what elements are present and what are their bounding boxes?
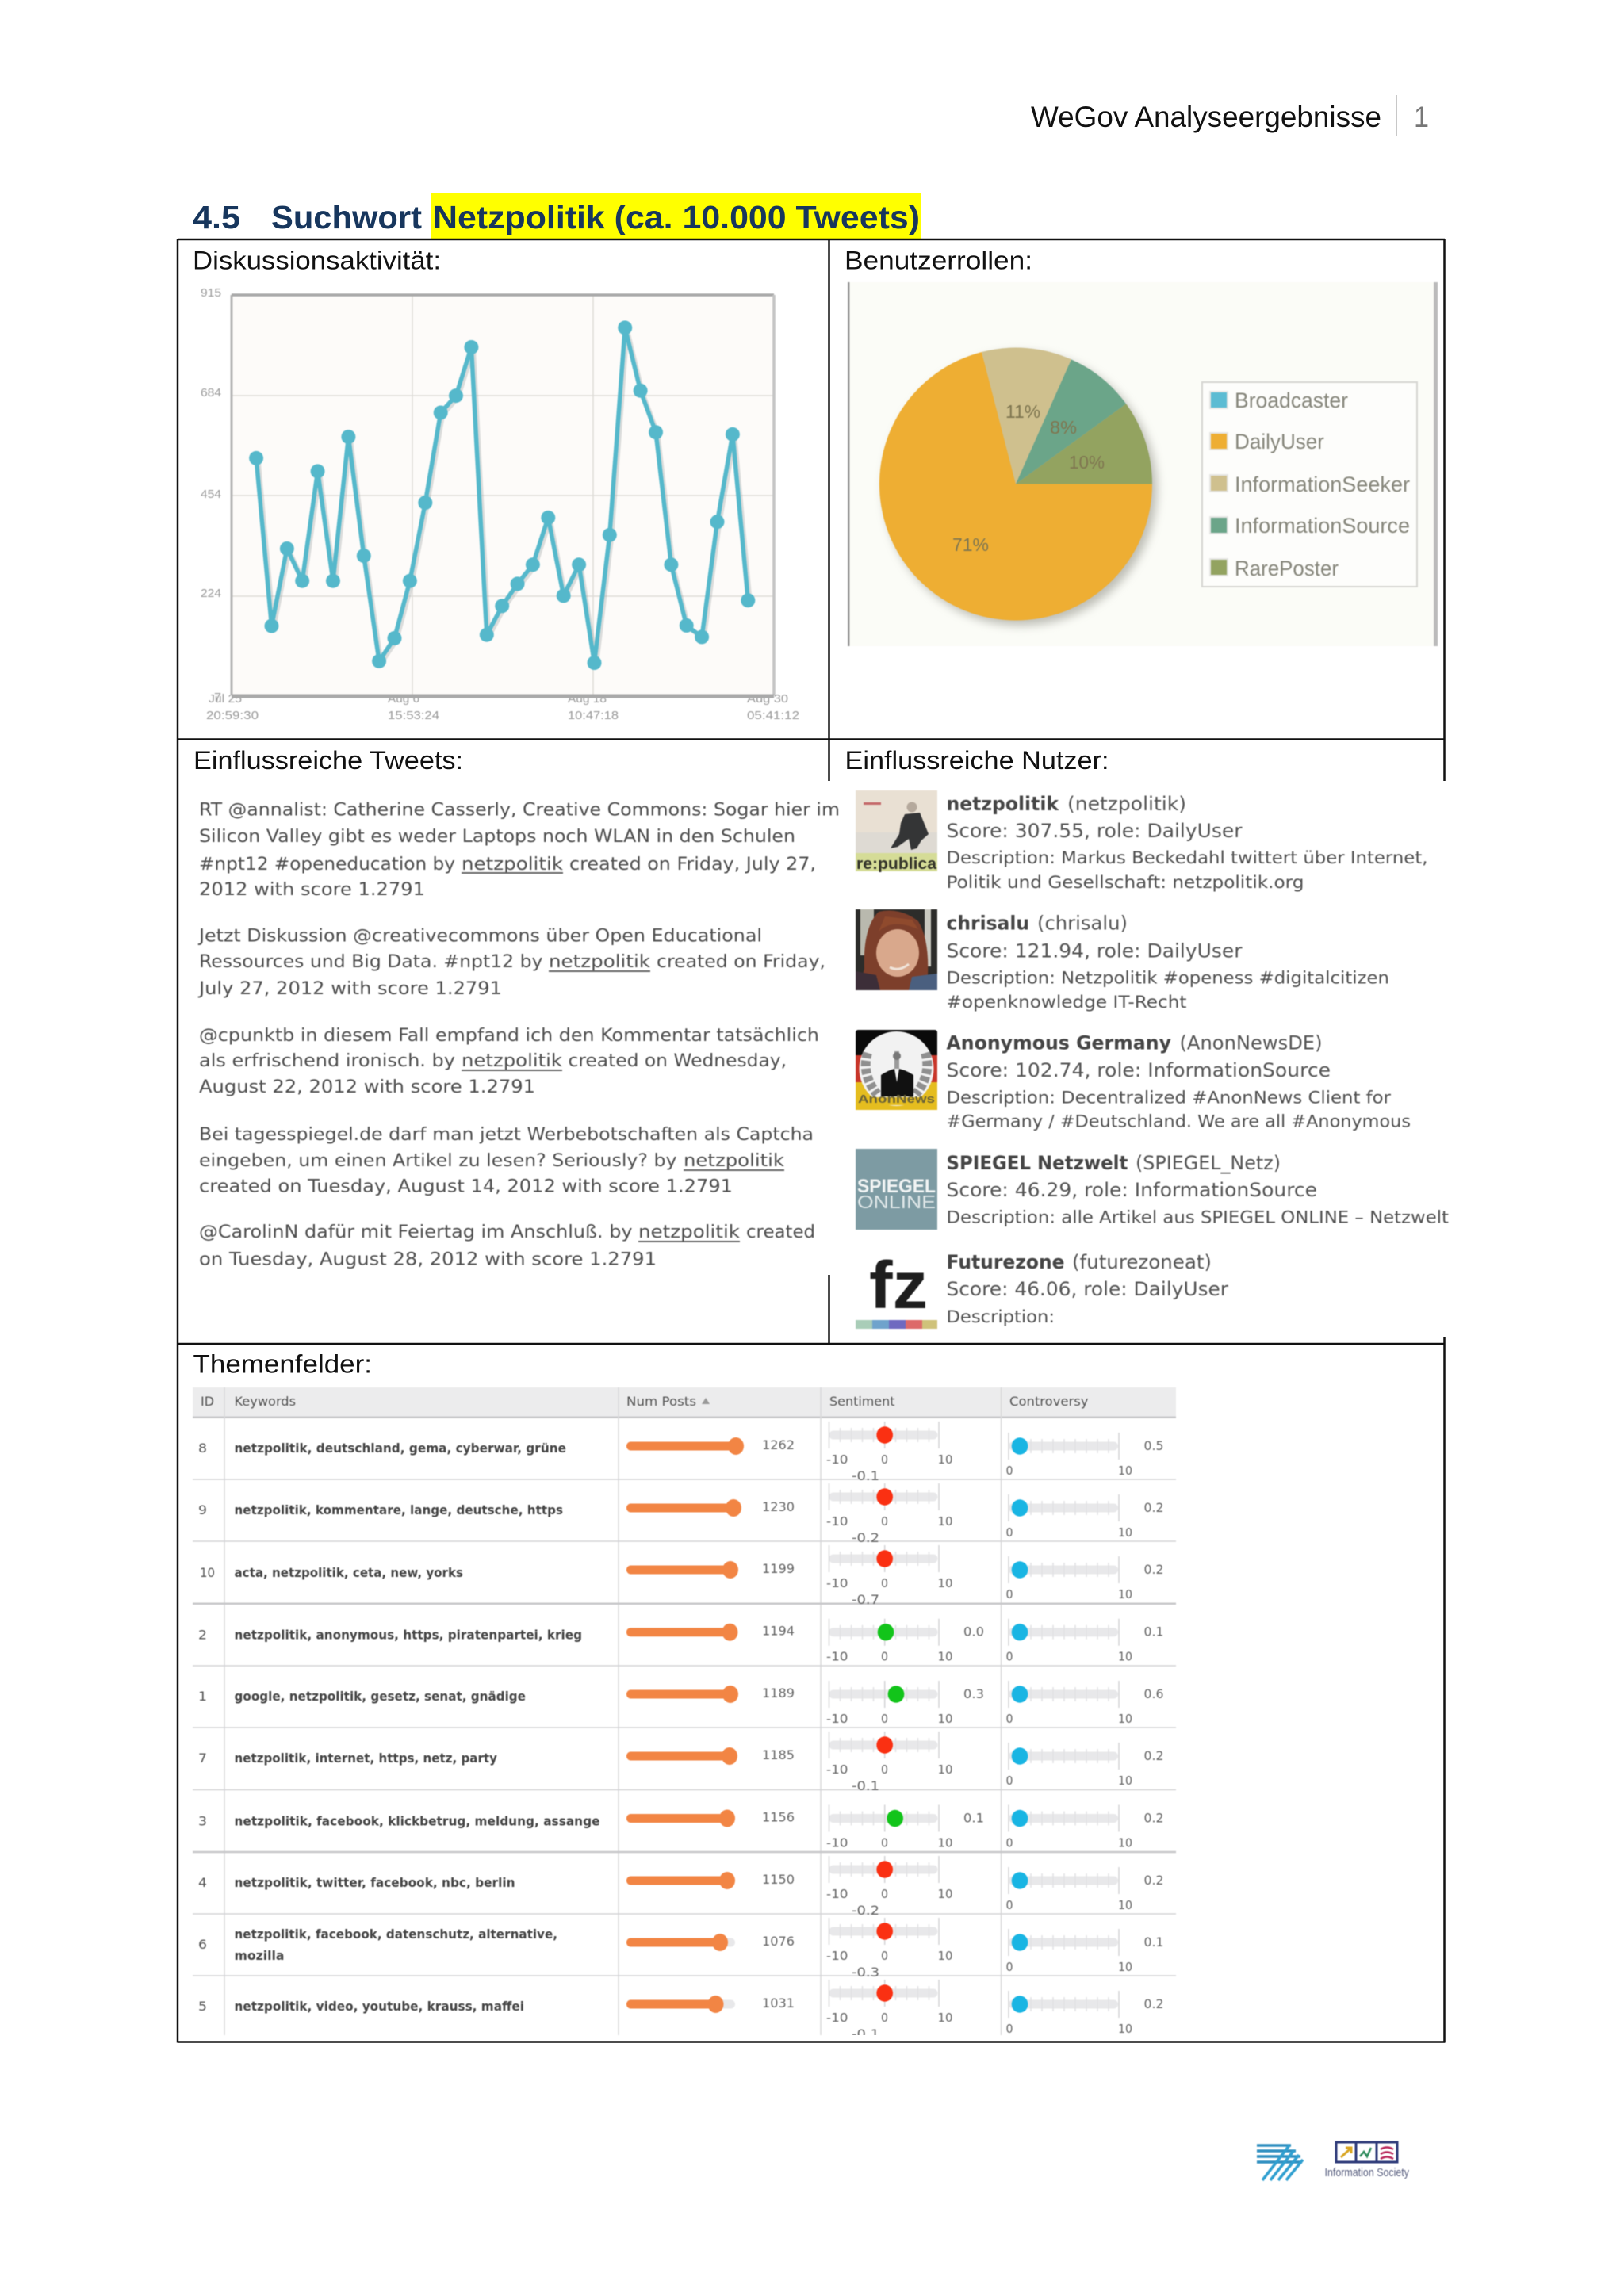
row: topic 10: 10 xyxy=(937,1576,953,1590)
tweet 3: netzpolitik xyxy=(462,1051,562,1071)
row: topic 2: 0.1 xyxy=(1143,1624,1164,1640)
row: topic 10: -0.7 xyxy=(852,1592,879,1607)
tweet 2 xyxy=(197,926,825,999)
row: topic 2: 10 xyxy=(1118,1650,1132,1664)
row: topic 1: 0 xyxy=(1005,1712,1013,1726)
tweet 4 xyxy=(199,1125,814,1197)
row: topic 4: 10 xyxy=(1118,1898,1132,1912)
user: Anonymous Germany: #Germany / #Deutschland. We are all #Anonymous xyxy=(947,1112,1411,1131)
row: topic 8: -10 xyxy=(826,1452,848,1467)
line chart: discussion activity: 15:53:24 xyxy=(388,709,439,722)
row: topic 6: 10 xyxy=(937,1949,953,1963)
user: netzpolitik: Description: Markus Beckedahl twittert über Internet, xyxy=(947,848,1427,867)
row: topic 10: 0 xyxy=(881,1576,888,1590)
tweet 2: Jetzt Diskussion @creativecommons über Open Educational xyxy=(197,926,762,947)
page header: 1 xyxy=(1414,101,1429,133)
row: topic 4: 0 xyxy=(1005,1898,1013,1912)
row: topic 2 xyxy=(198,1619,1164,1664)
row: topic 1 xyxy=(198,1681,1164,1726)
row: topic 9: 0.2 xyxy=(1143,1500,1164,1515)
tweet 1: created on Friday, July 27, xyxy=(569,855,816,874)
section title: Suchwort xyxy=(271,199,422,235)
row: topic 5: 0 xyxy=(1005,2022,1013,2036)
user: SPIEGEL Netzwelt: SPIEGEL Netzwelt xyxy=(947,1152,1128,1174)
row: topic 10: 0 xyxy=(1005,1587,1013,1601)
logo: Information Society xyxy=(1324,2142,1409,2179)
icon: Anonymous avatar: AnonNews xyxy=(858,1093,935,1106)
tweet 3: August 22, 2012 with score 1.2791 xyxy=(199,1077,535,1097)
row: topic 1: 1189 xyxy=(762,1686,795,1701)
user: Anonymous Germany: (AnonNewsDE) xyxy=(1180,1032,1323,1054)
line chart: discussion activity: 454 xyxy=(201,488,221,501)
heading: Einflussreiche Nutzer: Einflussreiche Nutzer: xyxy=(845,746,1109,775)
row: topic 8: 0 xyxy=(1005,1464,1013,1478)
row: topic 6: 10 xyxy=(1118,1960,1132,1974)
row: topic 3: 3 xyxy=(198,1814,207,1828)
row: topic 5: netzpolitik, video, youtube, krauss, maffei xyxy=(235,1999,524,2014)
row: topic 8: netzpolitik, deutschland, gema, cyberwar, grüne xyxy=(235,1441,566,1456)
tweet 4: eingeben, um einen Artikel zu lesen? Seriously? by xyxy=(199,1151,677,1171)
row: topic 7: 0.2 xyxy=(1143,1748,1164,1763)
user: chrisalu: #openknowledge IT-Recht xyxy=(947,993,1186,1012)
user: SPIEGEL Netzwelt xyxy=(856,1149,1449,1230)
logo: Information Society: Information Society xyxy=(1324,2166,1409,2179)
row: topic 2: 2 xyxy=(198,1628,207,1643)
user: Anonymous Germany: Score: 102.74, role: InformationSource xyxy=(947,1059,1331,1081)
row: topic 9: 0 xyxy=(1005,1525,1013,1540)
table header xyxy=(193,1387,1176,2035)
line chart: discussion activity: 915 xyxy=(201,286,221,300)
row: topic 8: -0.1 xyxy=(852,1468,879,1483)
user: SPIEGEL Netzwelt: (SPIEGEL_Netz) xyxy=(1136,1152,1281,1174)
row: topic 5: 1031 xyxy=(762,1996,795,2011)
user: Futurezone: (futurezoneat) xyxy=(1072,1251,1212,1273)
row: topic 8: 8 xyxy=(198,1441,207,1456)
row: topic 4: netzpolitik, twitter, facebook, nbc, berlin xyxy=(235,1875,515,1890)
row: topic 3: 0.2 xyxy=(1143,1811,1164,1825)
row: topic 3: 0 xyxy=(881,1836,888,1850)
tweet 5: netzpolitik xyxy=(638,1223,740,1242)
line chart: discussion activity: 224 xyxy=(201,587,221,600)
row: topic 6: -0.3 xyxy=(852,1965,879,1980)
heading: Diskussionsaktivität: Diskussionsaktivität: xyxy=(193,246,441,274)
row: topic 3: netzpolitik, facebook, klickbetrug, meldung, assange xyxy=(235,1814,600,1828)
row: topic 3 xyxy=(198,1804,1164,1850)
user: chrisalu xyxy=(856,909,1389,1012)
row: topic 3: 0.1 xyxy=(963,1811,984,1825)
row: topic 3: -10 xyxy=(826,1836,848,1850)
pie chart: user roles: 8% xyxy=(1050,417,1077,438)
row: topic 5: 0 xyxy=(881,2011,888,2025)
tweet 1: RT @annalist: Catherine Casserly, Creative Commons: Sogar hier im xyxy=(199,801,840,820)
tweet 3: als erfrischend ironisch. by xyxy=(199,1051,455,1071)
row: topic 3: 0 xyxy=(1005,1836,1013,1850)
pie chart: user roles xyxy=(848,282,1438,646)
row: topic 7: 10 xyxy=(937,1762,953,1777)
row: topic 1: google, netzpolitik, gesetz, senat, gnädige xyxy=(235,1689,526,1704)
line chart: discussion activity: 20:59:30 xyxy=(206,709,259,722)
row: topic 7: netzpolitik, internet, https, netz, party xyxy=(235,1751,498,1766)
icon: Anonymous avatar xyxy=(856,1030,937,1110)
panel: Themenfelder xyxy=(193,1349,1176,2042)
tweet 5: on Tuesday, August 28, 2012 with score 1.2791 xyxy=(199,1249,657,1270)
tweet list xyxy=(197,801,840,1270)
row: topic 6: 6 xyxy=(198,1937,207,1952)
row: topic 1: 1 xyxy=(198,1689,207,1704)
table header: Num Posts xyxy=(626,1394,696,1409)
user: netzpolitik xyxy=(856,790,1427,892)
legend: InformationSeeker xyxy=(1235,473,1410,496)
row: topic 1: 0 xyxy=(881,1712,888,1726)
row: topic 3: 10 xyxy=(937,1836,953,1850)
row: topic 8: 0.5 xyxy=(1143,1438,1164,1453)
panel: Einflussreiche Nutzer xyxy=(845,746,1449,1329)
row: topic 6: 0 xyxy=(1005,1960,1013,1974)
row: topic 7: 10 xyxy=(1118,1774,1132,1788)
panel: Einflussreiche Tweets xyxy=(193,746,840,1270)
row: topic 2: 0 xyxy=(881,1650,888,1664)
line chart: discussion activity: 684 xyxy=(201,386,221,400)
user: Anonymous Germany: Anonymous Germany xyxy=(947,1032,1171,1054)
row: topic 4: 4 xyxy=(198,1875,207,1890)
row: topic 10: 10 xyxy=(1118,1587,1132,1601)
tweet 5 xyxy=(199,1223,815,1270)
table header: Controversy xyxy=(1009,1394,1088,1409)
icon: SPIEGEL ONLINE avatar: SPIEGEL xyxy=(857,1176,936,1197)
row: topic 7: 0 xyxy=(881,1762,888,1777)
tweet 4: Bei tagesspiegel.de darf man jetzt Werbebotschaften als Captcha xyxy=(199,1125,814,1145)
row: topic 7: 0 xyxy=(1005,1774,1013,1788)
section title: 4.5 xyxy=(193,199,240,235)
icon: re:publica avatar xyxy=(856,790,937,873)
row: topic 9: -0.2 xyxy=(852,1530,879,1545)
row: topic 8: 1262 xyxy=(762,1437,795,1452)
row: topic 3: 10 xyxy=(1118,1836,1132,1850)
icon: re:publica avatar: re:publica xyxy=(856,855,937,873)
row: topic 7: 1185 xyxy=(762,1747,795,1762)
row: topic 5: -10 xyxy=(826,2011,848,2025)
row: topic 8: 0 xyxy=(881,1452,888,1467)
row: topic 10: 1199 xyxy=(762,1561,795,1576)
row: topic 8: 10 xyxy=(937,1452,953,1467)
user: SPIEGEL Netzwelt: Description: alle Artikel aus SPIEGEL ONLINE – Netzwelt xyxy=(947,1208,1449,1227)
row: topic 6: mozilla xyxy=(235,1948,284,1963)
tweet 2: July 27, 2012 with score 1.2791 xyxy=(197,979,502,999)
logo: FP7 xyxy=(1257,2145,1303,2180)
line chart: discussion activity: Aug 6 xyxy=(388,692,419,706)
tweet 4: netzpolitik xyxy=(684,1151,784,1171)
row: topic 5: 5 xyxy=(198,1999,207,2014)
row: topic 7 xyxy=(198,1732,1164,1793)
heading: Benutzerrollen: Benutzerrollen: xyxy=(845,246,1032,274)
row: topic 5: -0.1 xyxy=(852,2026,879,2042)
table header: Sentiment xyxy=(829,1394,894,1409)
row: topic 9: 10 xyxy=(937,1514,953,1529)
row: topic 5: 0.2 xyxy=(1143,1996,1164,2011)
row: topic 9: 0 xyxy=(881,1514,888,1529)
row: topic 10: -10 xyxy=(826,1576,848,1590)
row: topic 5: 10 xyxy=(1118,2022,1132,2036)
tweet 3: created on Wednesday, xyxy=(568,1051,787,1071)
row: topic 2: 10 xyxy=(937,1650,953,1664)
user: chrisalu: (chrisalu) xyxy=(1037,912,1128,934)
row: topic 6: 1076 xyxy=(762,1934,795,1949)
tweet 4: created on Tuesday, August 14, 2012 with score 1.2791 xyxy=(199,1177,733,1197)
row: topic 9: netzpolitik, kommentare, lange, deutsche, https xyxy=(235,1502,563,1517)
row: topic 3: 1156 xyxy=(762,1809,795,1825)
user: netzpolitik: (netzpolitik) xyxy=(1067,793,1186,815)
row: topic 2: 0 xyxy=(1005,1650,1013,1664)
row: topic 4: 1150 xyxy=(762,1872,795,1887)
row: topic 7: 7 xyxy=(198,1751,207,1766)
row: topic 1: 10 xyxy=(937,1712,953,1726)
tweet 3: @cpunktb in diesem Fall empfand ich den Kommentar tatsächlich xyxy=(199,1026,819,1046)
line chart: discussion activity: 10:47:18 xyxy=(568,709,619,722)
row: topic 2: -10 xyxy=(826,1650,848,1664)
legend xyxy=(1202,382,1417,587)
row: topic 4: 0 xyxy=(881,1887,888,1901)
legend: RarePoster xyxy=(1235,557,1339,580)
pie chart: user roles: 11% xyxy=(1005,401,1040,422)
panel: Benutzerrollen xyxy=(845,246,1438,646)
row: topic 6: 0.1 xyxy=(1143,1934,1164,1950)
row: topic 5: 10 xyxy=(937,2011,953,2025)
line chart: discussion activity xyxy=(201,286,799,722)
row: topic 7: -10 xyxy=(826,1762,848,1777)
user: chrisalu: Description: Netzpolitik #openess #digitalcitizen xyxy=(947,969,1389,988)
user: chrisalu: Score: 121.94, role: DailyUser xyxy=(947,940,1243,962)
tweet 2: Ressources und Big Data. #npt12 by xyxy=(199,952,542,972)
tweet 1 xyxy=(199,801,840,900)
tweet 2: created on Friday, xyxy=(657,952,825,972)
icon: chrisalu portrait xyxy=(856,909,937,990)
row: topic 1: -10 xyxy=(826,1712,848,1726)
icon: SPIEGEL ONLINE avatar: ONLINE xyxy=(857,1192,936,1212)
row: topic 4 xyxy=(198,1856,1164,1918)
tweet 1: #npt12 #openeducation by xyxy=(199,855,455,874)
row: topic 4: -0.2 xyxy=(852,1903,879,1918)
row: topic 9 xyxy=(198,1483,1164,1545)
tweet 1: netzpolitik xyxy=(462,855,563,874)
row: topic 2: netzpolitik, anonymous, https, piratenpartei, krieg xyxy=(235,1628,582,1643)
tweet 1: 2012 with score 1.2791 xyxy=(199,880,425,900)
line chart: discussion activity: Aug 18 xyxy=(568,692,607,706)
user: Futurezone xyxy=(856,1248,1228,1329)
panel: Diskussionsaktivität xyxy=(193,246,799,722)
heading: Einflussreiche Tweets: Einflussreiche Tweets: xyxy=(193,746,463,775)
section title: Netzpolitik (ca. 10.000 Tweets) xyxy=(433,199,920,235)
row: topic 4: -10 xyxy=(826,1887,848,1901)
row: topic 6: -10 xyxy=(826,1949,848,1963)
user: Anonymous Germany xyxy=(856,1030,1411,1131)
row: topic 10: 0.2 xyxy=(1143,1562,1164,1577)
row: topic 9: 10 xyxy=(1118,1525,1132,1540)
row: topic 8 xyxy=(198,1422,1164,1483)
tweet 5: created xyxy=(746,1223,815,1242)
section title xyxy=(193,193,921,239)
row: topic 6 xyxy=(198,1918,1164,1980)
user: Anonymous Germany: Description: Decentralized #AnonNews Client for xyxy=(947,1088,1391,1107)
user list xyxy=(856,790,1449,1329)
legend: InformationSource xyxy=(1235,514,1410,538)
icon: fz avatar xyxy=(856,1248,937,1329)
icon: fz avatar: fz xyxy=(869,1248,928,1322)
row: topic 1: 0.3 xyxy=(963,1686,984,1701)
tweet 1: Silicon Valley gibt es weder Laptops noch WLAN in den Schulen xyxy=(199,827,795,847)
row: topic 6: 0 xyxy=(881,1949,888,1963)
line chart: discussion activity: 7 xyxy=(214,691,221,704)
tweet 3 xyxy=(199,1026,819,1097)
user: netzpolitik: Politik und Gesellschaft: netzpolitik.org xyxy=(947,873,1304,892)
user: netzpolitik: Score: 307.55, role: DailyUser xyxy=(947,820,1243,842)
row: topic 9: 1230 xyxy=(762,1499,795,1514)
row: topic 2: 0.0 xyxy=(963,1624,984,1640)
page header: WeGov Analyseergebnisse xyxy=(1031,101,1381,133)
row: topic 4: 10 xyxy=(937,1887,953,1901)
row: topic 8: 10 xyxy=(1118,1464,1132,1478)
heading: Themenfelder: Themenfelder: xyxy=(193,1349,372,1378)
row: topic 4: 0.2 xyxy=(1143,1873,1164,1888)
row: topic 7: -0.1 xyxy=(852,1778,879,1793)
legend: DailyUser xyxy=(1235,430,1324,453)
table header: ID xyxy=(201,1394,214,1409)
user: netzpolitik: netzpolitik xyxy=(947,793,1059,815)
line chart: discussion activity: Jul 25 xyxy=(209,692,242,706)
pie chart: user roles: 10% xyxy=(1069,452,1105,473)
row: topic 6: netzpolitik, facebook, datenschutz, alternative, xyxy=(235,1927,557,1942)
legend: Broadcaster xyxy=(1235,388,1348,412)
pie chart: user roles: 71% xyxy=(952,534,989,555)
user: chrisalu: chrisalu xyxy=(947,912,1029,934)
table: topics xyxy=(193,1387,1176,2042)
row: topic 1: 10 xyxy=(1118,1712,1132,1726)
row: topic 5 xyxy=(198,1980,1164,2042)
user: SPIEGEL Netzwelt: Score: 46.29, role: InformationSource xyxy=(947,1179,1317,1201)
row: topic 10: 10 xyxy=(200,1565,215,1580)
tweet 5: @CarolinN dafür mit Feiertag im Anschluß. by xyxy=(199,1223,633,1242)
user: Futurezone: Description: xyxy=(947,1307,1055,1326)
user: Futurezone: Futurezone xyxy=(947,1251,1064,1273)
tweet 2: netzpolitik xyxy=(549,952,650,972)
row: topic 9: 9 xyxy=(198,1502,207,1517)
row: topic 10: acta, netzpolitik, ceta, new, yorks xyxy=(235,1565,463,1580)
line chart: discussion activity: Aug 30 xyxy=(747,692,788,706)
row: topic 9: -10 xyxy=(826,1514,848,1529)
icon: SPIEGEL ONLINE avatar xyxy=(856,1149,937,1230)
row: topic 10 xyxy=(200,1545,1164,1607)
row: topic 2: 1194 xyxy=(762,1624,795,1639)
row: topic 1: 0.6 xyxy=(1143,1686,1164,1701)
user: Futurezone: Score: 46.06, role: DailyUser xyxy=(947,1278,1228,1300)
line chart: discussion activity: 05:41:12 xyxy=(747,709,799,722)
table header: Keywords xyxy=(235,1394,296,1409)
